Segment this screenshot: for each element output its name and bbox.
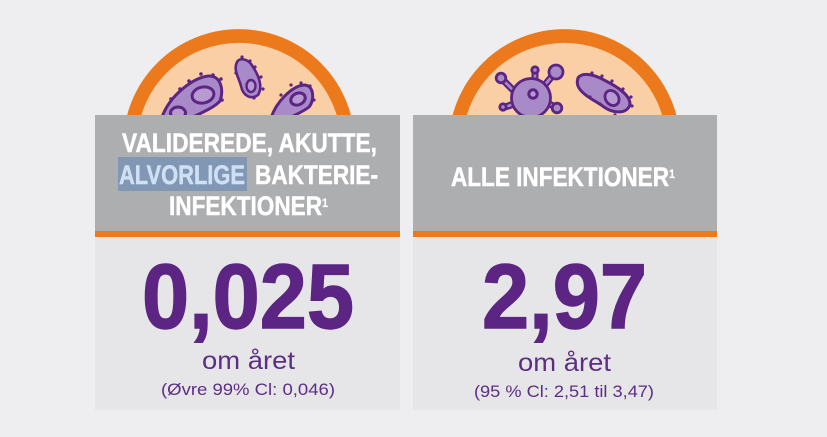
heading text: ALLE INFEKTIONER [451, 162, 669, 192]
heading text [119, 128, 378, 221]
panel: all infections [413, 36, 717, 410]
heading box [413, 115, 717, 237]
heading text: BAKTERIE- [255, 160, 378, 190]
heading text: VALIDEREDE, AKUTTE, [122, 128, 377, 158]
heading text: ALVORLIGE [119, 160, 245, 190]
heading box [95, 115, 400, 237]
icon: virus and bacterium in orange semicircle [456, 36, 674, 254]
big number: 2,97 [482, 246, 647, 348]
unit: om året [518, 349, 611, 377]
heading text: 1 [322, 196, 328, 210]
panel: serious bacterial infections [95, 36, 400, 410]
icon: bacteria in orange semicircle [130, 36, 348, 254]
heading text: INFEKTIONER [169, 191, 322, 221]
heading text: 1 [669, 167, 675, 181]
value box [413, 237, 717, 410]
unit: om året [202, 347, 295, 375]
confidence interval: (Øvre 99% Cl: 0,046) [161, 380, 335, 399]
confidence interval: (95 % Cl: 2,51 til 3,47) [474, 382, 654, 401]
value box [95, 237, 400, 410]
big number: 0,025 [142, 246, 354, 348]
